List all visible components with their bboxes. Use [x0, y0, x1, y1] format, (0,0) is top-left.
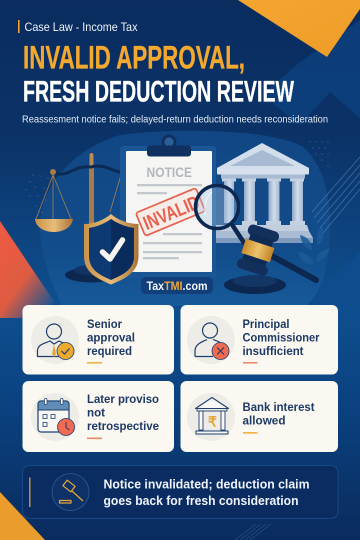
accent line [243, 432, 258, 434]
clipboard with notice [120, 136, 216, 278]
icon: gavel [224, 223, 316, 294]
icon: bank with rupee: ₹ [208, 414, 217, 430]
card: principal commissioner insufficient [180, 305, 338, 374]
accent line [87, 362, 102, 364]
icon: shield with check [84, 214, 138, 284]
conclusion text [104, 476, 310, 508]
card text: allowed [242, 414, 286, 428]
card text [242, 400, 314, 428]
diagonal lines: right [312, 157, 360, 233]
icon: magnifying glass [196, 186, 250, 252]
illustration: legal scene [25, 131, 360, 306]
card text: retrospective [87, 419, 159, 433]
conclusion text: goes back for fresh consideration [104, 493, 298, 508]
card text: approval [87, 330, 135, 344]
diagonal lines: bottom [235, 524, 271, 540]
clipboard board [120, 146, 216, 278]
subtitle: Reassesment notice fails; delayed-return deduction needs reconsideration [22, 114, 328, 126]
title: INVALID APPROVAL, [23, 40, 245, 76]
icon: bank with rupee [187, 393, 235, 441]
notice heading: NOTICE [146, 164, 192, 180]
card text: insufficient [242, 344, 304, 358]
card: bank interest allowed [180, 381, 338, 452]
invalid stamp: INVALID [140, 192, 203, 235]
card text: Senior [87, 317, 122, 331]
title [23, 40, 294, 108]
icon: balance scale [35, 153, 125, 282]
notice paper [126, 151, 212, 272]
dotted decoration: top right [309, 141, 329, 167]
accent: bottom-left orange triangle [0, 492, 45, 540]
accent: top-right orange triangle [238, 0, 360, 57]
card text [242, 317, 320, 358]
notice text lines [137, 184, 202, 259]
card: later proviso not retrospective [22, 381, 174, 452]
eyebrow label: Case Law - Income Tax [24, 20, 138, 34]
card text: not [87, 406, 105, 420]
card text [87, 317, 135, 358]
clip [147, 136, 191, 156]
icon: gavel badge [52, 474, 89, 510]
accent: left red triangle [0, 221, 55, 318]
icon: laurel [298, 226, 330, 265]
card text: Commissioner [242, 330, 320, 344]
card text: Later proviso [87, 392, 159, 406]
scene backdrop [40, 131, 330, 306]
card text [87, 392, 159, 433]
icon: calendar with clock [31, 393, 79, 441]
accent line [87, 438, 102, 439]
icon: person with cross [187, 316, 235, 364]
brand badge: TaxTMI.com [146, 279, 208, 293]
dotted decoration: left [25, 174, 49, 213]
card text: required [87, 344, 132, 358]
accent line [243, 362, 258, 364]
icon: courthouse [216, 143, 313, 243]
conclusion text: Notice invalidated; deduction claim [104, 476, 310, 492]
card: senior approval required [22, 305, 174, 374]
icon: person with check [31, 316, 79, 364]
card text: Bank interest [242, 400, 314, 414]
panel: conclusion [22, 466, 338, 518]
card text: Principal [242, 317, 290, 331]
